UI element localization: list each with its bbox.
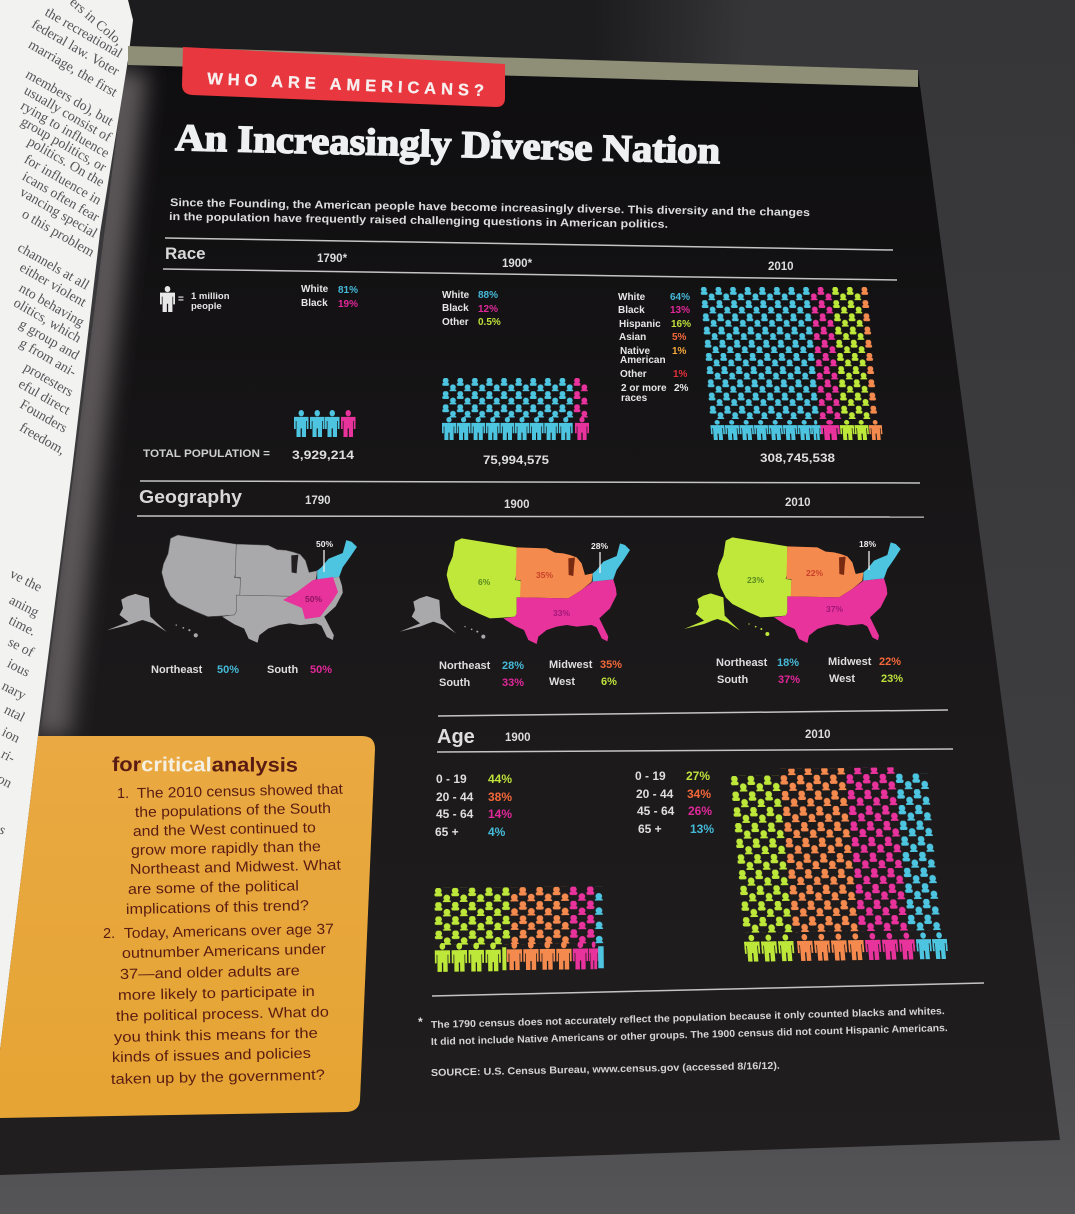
panel: white facing page with body text: vancing special (17, 185, 100, 242)
shadow above page (125, 0, 750, 72)
geography legend 1790: 50% (310, 664, 332, 676)
age legend 1900: 38% (488, 790, 512, 804)
panel: white facing page with body text: either violent (17, 260, 89, 311)
heading: geography: Geography (139, 487, 242, 507)
panel: white facing page with body text: ntal (1, 703, 27, 726)
question one: and the West continued to (133, 820, 316, 840)
question one: the populations of the South (135, 801, 331, 821)
panel: white facing page with body text: ious (4, 657, 32, 681)
panel: white facing page with body text: olitics, which (11, 296, 84, 346)
panel: white facing page with body text: se of (5, 635, 36, 661)
race legend 2010: Asian (619, 332, 646, 343)
year headers (505, 729, 831, 744)
banner: who are Americans (182, 47, 505, 107)
legend: one figure equals one million people: 1 million (191, 291, 230, 302)
heading: for critical analysis: forcritical analysis (112, 754, 298, 777)
race legend 1790 (301, 284, 358, 310)
age legend 2010: 34% (687, 787, 711, 801)
olive band (128, 46, 918, 87)
year headers: 1900 (505, 732, 531, 744)
age legend 1900: 65 + (435, 825, 459, 839)
panel: white facing page with body text: group politics, or (18, 114, 109, 176)
geography legend 2010: Northeast (716, 657, 768, 669)
section: race (143, 238, 897, 467)
question one: are some of the political (128, 878, 299, 898)
panel: white facing page with body text: ve the (7, 567, 44, 596)
section: geography (107, 481, 924, 689)
map: 2010 (684, 537, 901, 643)
legend: one figure equals one million people (160, 286, 230, 312)
race legend 1900: Other (442, 317, 469, 328)
race legend 2010 (618, 292, 691, 404)
source: SOURCE: U.S. Census Bureau, www.census.gov (accessed 8/16/12). (431, 1061, 780, 1079)
age legend 1900: 14% (488, 807, 512, 821)
question two: you think this means for the (114, 1026, 318, 1046)
pictogram: race 2010 (700, 287, 883, 440)
year headers: 1900* (502, 258, 533, 270)
map: 1900: 28% (591, 541, 608, 551)
geography legend 1900: Northeast (439, 660, 491, 672)
map: 2010: 23% (747, 575, 764, 585)
geography legend 1900: Midwest (549, 659, 593, 671)
age legend 1900: 4% (488, 825, 506, 839)
question one: 1. (117, 786, 129, 802)
age legend 1900 (435, 772, 512, 839)
map: 2010: 18% (859, 539, 876, 549)
panel: white facing page with body text: rying to influence (18, 99, 112, 161)
panel: white facing page with body text: nto behaving (16, 281, 86, 330)
section: age (434, 710, 953, 972)
panel: white facing page with body text: freedom, (17, 420, 68, 458)
panel: white facing page with body text: usually consist of (21, 83, 114, 146)
race legend 2010: 5% (672, 332, 687, 343)
race legend 2010: Black (618, 305, 645, 316)
age legend 1900: 44% (488, 772, 512, 786)
panel: white facing page with body text: Founders (17, 397, 70, 436)
intro text: Since the Founding, the American people have become increasingly diverse. This diversity and the changes (170, 197, 810, 219)
race legend 2010: races (621, 393, 648, 404)
map: 1790 (107, 535, 357, 643)
question one: grow more rapidly than the (131, 839, 321, 859)
race legend 2010: 2 or more (621, 383, 667, 394)
race legend 1900: Black (442, 303, 469, 314)
map: 1790: 50% (305, 594, 322, 604)
geography legend 2010: Midwest (828, 656, 872, 668)
race legend 2010: 2% (674, 383, 689, 394)
geography legend 2010: West (829, 673, 855, 685)
footnote (418, 1006, 948, 1048)
geography legend 1900 (439, 659, 622, 689)
race legend 2010: Hispanic (619, 319, 661, 330)
age legend 1900: 0 - 19 (436, 772, 467, 786)
question one (117, 782, 343, 918)
panel: white facing page with body text: time. (6, 613, 38, 640)
panel: white facing page with body text (0, 0, 133, 1050)
age legend 2010: 13% (690, 822, 714, 836)
panel: white facing page with body text: icans often fear (19, 169, 102, 226)
race legend 2010: 1% (673, 369, 688, 380)
race legend 2010: 16% (671, 319, 691, 330)
footnote: * (418, 1015, 423, 1029)
map: 1900: 35% (536, 570, 553, 580)
race legend 2010: American (620, 355, 666, 366)
race legend 1900: 88% (478, 290, 498, 301)
race legend 1790: White (301, 284, 329, 295)
race legend 2010: Native (620, 346, 650, 357)
geography legend 1790: Northeast (151, 664, 203, 676)
footnote: It did not include Native Americans or other groups. The 1900 census did not count Hispanic Americans. (431, 1023, 948, 1048)
question two: outnumber Americans under (122, 942, 326, 962)
geography legend 1900: 6% (601, 676, 617, 688)
race legend 1900 (442, 290, 501, 328)
race legend 1900: 0.5% (478, 317, 501, 328)
question two (103, 922, 334, 1088)
map: 1900: 33% (553, 608, 570, 618)
geography legend 2010: South (717, 674, 748, 686)
footnote: The 1790 census does not accurately reflect the population because it only counted blacks and whites. (431, 1006, 945, 1031)
panel: white facing page with body text: federal law. Voter (29, 17, 122, 80)
map: 1900 (400, 538, 630, 644)
total population row: TOTAL POPULATION = (143, 448, 270, 460)
panel: white facing page with body text: aning (6, 593, 41, 621)
race legend 2010: 13% (670, 305, 690, 316)
age legend 2010: 27% (686, 769, 710, 783)
year headers: 2010 (805, 729, 831, 741)
race legend 1790: 81% (338, 285, 358, 296)
question two: 37—and older adults are (120, 963, 300, 983)
intro text (169, 197, 810, 231)
geography legend 2010: 18% (777, 657, 799, 669)
panel: white facing page with body text: g from ani- (16, 336, 79, 381)
geography legend 1900: West (549, 676, 575, 688)
panel: white facing page with body text: for influence in (21, 152, 104, 208)
year headers: 2010 (768, 261, 794, 273)
pictogram: race 1790 (294, 410, 356, 437)
geography legend 1790: 50% (217, 664, 239, 676)
map: 2010: 37% (826, 604, 843, 614)
year headers (305, 495, 811, 511)
panel: white facing page with body text: o this problem (19, 207, 97, 261)
geography legend 1790: South (267, 664, 298, 676)
year headers: 2010 (785, 497, 811, 509)
question two: more likely to participate in (118, 984, 315, 1004)
race legend 2010: White (618, 292, 646, 303)
title: An Increasingly Diverse Nation (175, 117, 721, 172)
year headers: 1790 (305, 495, 331, 507)
race legend 1790: Black (301, 298, 328, 309)
map: 1900: 6% (478, 577, 491, 587)
panel: white facing page with body text: politics. On the (25, 135, 106, 190)
geography legend 1900: South (439, 677, 470, 689)
race legend 1900: 12% (478, 304, 498, 315)
question two: taken up by the government? (111, 1068, 325, 1088)
question two: 2. (103, 926, 115, 942)
age legend 2010 (635, 769, 714, 836)
race legend 1900: White (442, 290, 470, 301)
footer divider (432, 983, 984, 996)
race legend 2010: 1% (672, 346, 687, 357)
question two: kinds of issues and policies (112, 1046, 311, 1066)
panel: white facing page with body text: eful direct (16, 377, 73, 419)
panel: white facing page with body text: channels at all (15, 240, 92, 294)
geography legend 2010: 22% (879, 656, 901, 668)
geography legend 2010: 23% (881, 673, 903, 685)
map: 1790: 50% (316, 539, 333, 549)
race legend 1790: 19% (338, 299, 358, 310)
question one: Northeast and Midwest. What (130, 858, 341, 878)
age legend 1900: 20 - 44 (436, 790, 474, 804)
panel: white facing page with body text: marriage, the first (25, 38, 120, 101)
pictogram: race 1900 (442, 378, 589, 440)
panel: for critical analysis (0, 736, 375, 1118)
total population row: 3,929,214 (292, 450, 355, 462)
age legend 1900: 45 - 64 (436, 807, 474, 821)
geography legend 1900: 33% (502, 677, 524, 689)
question one: The 2010 census showed that (137, 782, 343, 802)
age legend 2010: 26% (688, 804, 712, 818)
geography legend 1900: 28% (502, 660, 524, 672)
total population row: 308,745,538 (760, 453, 836, 465)
geography legend 2010: 37% (778, 674, 800, 686)
heading: age: Age (437, 726, 475, 748)
race legend 2010: 64% (670, 292, 690, 303)
age legend 2010: 45 - 64 (637, 804, 675, 818)
total population row: 75,994,575 (483, 455, 550, 467)
age legend 2010: 20 - 44 (636, 787, 674, 801)
pictogram: age 1900 (434, 886, 604, 972)
total population row (143, 448, 836, 467)
map: 2010: 22% (806, 568, 823, 578)
panel: white facing page with body text: g group and (16, 317, 82, 363)
question two: the political process. What do (116, 1005, 329, 1025)
year headers: 1900 (504, 499, 530, 511)
age legend 2010: 0 - 19 (635, 769, 666, 783)
year headers: 1790* (317, 253, 348, 265)
panel: white facing page with body text: protesters (21, 360, 76, 400)
banner: who are Americans: WHO ARE AMERICANS? (207, 70, 484, 100)
legend: one figure equals one million people: people (191, 301, 222, 312)
legend: one figure equals one million people: = (178, 294, 184, 305)
question one: implications of this trend? (126, 898, 309, 918)
geography legend 2010 (716, 656, 903, 686)
pictogram: age 2010 (729, 767, 949, 962)
panel: white facing page with body text: the recreational (42, 5, 125, 62)
year headers (317, 253, 794, 273)
geography legend 1790 (151, 664, 332, 676)
intro text: in the population have frequently raised challenging questions in American politics. (169, 211, 668, 231)
page curl highlight (50, 70, 128, 736)
question two: Today, Americans over age 37 (124, 922, 334, 942)
heading: race: Race (165, 244, 206, 263)
panel: white facing page with body text: members do), but (23, 67, 116, 130)
race legend 2010: Other (620, 369, 647, 380)
age legend 2010: 65 + (638, 822, 662, 836)
geography legend 1900: 35% (600, 659, 622, 671)
